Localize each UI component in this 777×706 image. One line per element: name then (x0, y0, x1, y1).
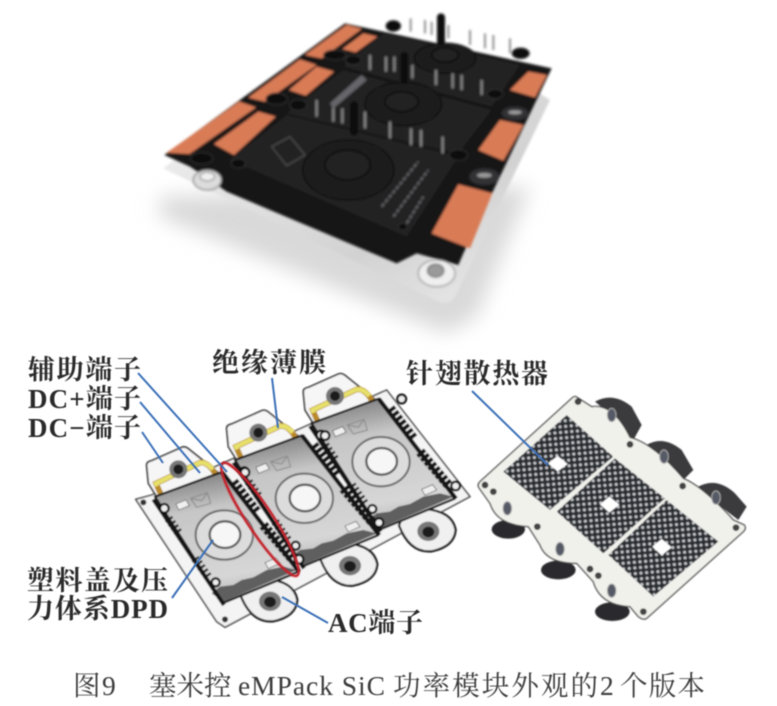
label: pin-fin heat sink: 针翅散热器 (406, 358, 548, 389)
bolts (503, 408, 720, 597)
bolts (193, 170, 455, 287)
pressure discs (303, 43, 476, 200)
caption: 9 (102, 670, 116, 701)
caption: 图 (73, 670, 100, 701)
baseplate holes (140, 499, 228, 622)
diamond openings (548, 456, 672, 555)
labels (27, 348, 548, 638)
orange DC terminal strips (167, 25, 547, 248)
module body (164, 23, 552, 265)
mounting holes (482, 399, 739, 615)
caption: 个版本 (620, 670, 705, 701)
label: AC terminal: AC端子 (328, 608, 423, 638)
caption: 功率模块外观的 (393, 670, 598, 701)
red highlight ellipse (212, 456, 308, 582)
standoffs (190, 21, 529, 230)
shadow under baseplate (160, 187, 530, 333)
diagram: module with cut-away cover (136, 374, 470, 627)
caption: 塞米控 (149, 670, 232, 701)
label plate (272, 75, 428, 223)
label: plastic cover and DPD: 塑料盖及压 (27, 566, 168, 596)
caption: eMPack SiC (238, 670, 385, 701)
baseplate (163, 67, 550, 303)
label: DC+ terminal: DC+端子 (28, 384, 141, 414)
tall posts (354, 17, 441, 132)
leader lines (138, 373, 548, 623)
label: auxiliary terminal: 辅助端子 (28, 355, 141, 385)
baseplate outline (136, 390, 470, 627)
auxiliary pins (317, 18, 510, 153)
front clamps (492, 520, 630, 621)
rear clamps (595, 398, 747, 520)
heat sink plate (478, 397, 745, 619)
pin arrays (503, 415, 718, 597)
module top faces (230, 33, 520, 237)
AC terminal tabs (241, 509, 456, 621)
diagram: pin-fin heat sink (478, 397, 747, 621)
label: plastic cover and DPD line 2: 力体系DPD (27, 594, 168, 624)
caption: 2 (600, 670, 614, 701)
label: DC- terminal: DC−端子 (28, 413, 141, 443)
three module units (147, 374, 460, 605)
photo: eMPack module on baseplate (160, 17, 552, 333)
label: insulation film: 绝缘薄膜 (212, 348, 326, 378)
silver humps (469, 107, 528, 185)
